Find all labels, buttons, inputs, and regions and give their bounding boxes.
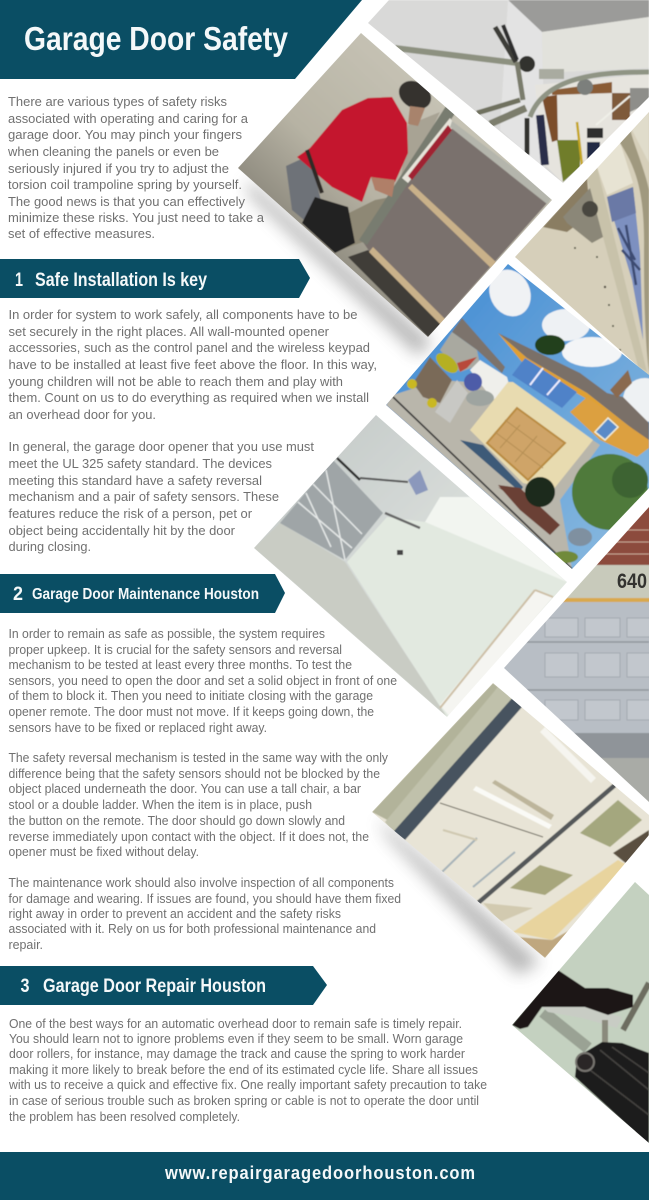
section 3 text [8,1016,487,1124]
footer band with website URL [0,1152,649,1200]
section 1 text: In general, the garage door opener that you use must [8,439,314,454]
section 2 text: object placed underneath the door. You can use a tall chair, a bar [8,781,362,796]
intro paragraph: associated with operating and caring for a [8,111,249,126]
intro paragraph: set of effective measures. [8,226,155,241]
section 3 text: in case of serious trouble such as broken spring or cable is not to operate the door until [9,1093,479,1108]
section 2 text: reverse immediately upon contact with the object. If it does not, the [8,829,369,844]
section 3 text: You should learn not to ignore problems even if they seem to be small. Worn garage [9,1031,463,1046]
photo: technician in red shirt working on door [230,30,560,340]
photo shadows [246,178,540,975]
heading 2: Garage Door Maintenance Houston: Garage Door Maintenance Houston [32,586,259,603]
section 1 text: In order for system to work safely, all components have to be [8,307,358,322]
section 1 text: object being accidentally hit by the door [8,523,236,538]
section 2 text: In order to remain as safe as possible, the system requires [8,626,325,641]
intro paragraph: minimize these risks. You just need to take a [8,210,265,225]
section 1 text: during closing. [8,539,91,554]
section 2 text: The safety reversal mechanism is tested in the same way with the only [8,750,388,765]
photo: brick wall, house number 640 and white garage door [500,500,649,808]
section 1 text [8,307,377,554]
photo: torsion spring hardware on garage ceiling [360,0,649,190]
heading 1: Safe Installation [0,259,310,298]
section 2 text: associated with it. Rely on us for both professional maintenance and [8,921,376,936]
intro paragraph: seriously injured if you try to adjust the [8,161,229,176]
section 1 text: an overhead door for you. [8,407,156,422]
section 2 text: mechanism to be tested at least every three months. To test the [8,657,352,672]
section 2 text: proper upkeep. It is crucial for the safety sensors and reversal [8,642,342,657]
section 1 text: them. Count on us to do everything as required when we install [8,390,369,405]
photo: garage interior with white walls [250,410,570,720]
footer band with website URL: www.repairgaragedoorhouston.com [164,1163,476,1183]
intro paragraph: when cleaning the panels or even be [7,144,219,159]
intro paragraph: torsion coil trampoline spring by yourself. [8,177,242,192]
section 2 text: for damage and wearing. If issues are found, you should have them fixed [8,891,401,906]
photo: yellow house with wooden garage door [380,260,649,575]
section 1 text: mechanism and a pair of safety sensors. These [8,489,279,504]
section 2 text: sensors, you need to open the door and set a solid object in front of one [8,673,397,688]
intro paragraph [7,94,265,241]
heading 1: Safe Installation: Safe Installation Is key [35,270,207,291]
section 1 text: set securely in the right places. All wall-mounted opener [8,324,330,339]
section 3 text: making it more likely to break before the end of its estimated cycle life. Share all issues [9,1062,478,1077]
section 2 text: repair. [8,937,43,952]
section 3 text: with us to receive a quick and effective fix. One really important safety precaution to take [8,1077,487,1092]
section 1 text: young children will not be able to reach them and play with [8,374,343,389]
heading 3: Garage Door Repair Houston [0,966,327,1005]
section 2 text: difference being that the safety sensors should not be blocked by the [8,766,380,781]
title: Garage Door Safety [24,20,289,57]
photo: torsion spring closeup [510,875,649,1145]
section 2 text: sensors have to be fixed or replaced right away. [8,720,267,735]
heading 1: Safe Installation: 1 [15,270,23,291]
section 1 text: accessories, such as the control panel and the wireless keypad [8,340,370,355]
section 2 text: stool or a double ladder. When the item is in place, push [8,797,312,812]
heading 2: Garage Door Maintenance Houston: 2 [13,584,23,605]
intro paragraph: There are various types of safety risks [8,94,227,109]
section 3 text: door rollers, for instance, may damage the track and cause the spring to work harder [9,1046,466,1061]
photo: cream garage door interior [370,680,649,965]
section 2 text: of them to block it. Then you need to initiate closing with the garage [8,688,373,703]
section 2 text [8,626,401,952]
heading 2: Garage Door Maintenance Houston [0,574,285,613]
section 1 text: meeting this standard have a safety reversal [8,473,262,488]
section 2 text: the button on the remote. The door should go down slowly and [8,813,345,828]
intro paragraph: garage door. You may pinch your fingers [8,127,242,142]
section 3 text: One of the best ways for an automatic overhead door to remain safe is timely repair. [9,1016,462,1031]
section 2 text: opener remote. The door must not move. If it keeps going down, the [8,704,374,719]
section 1 text: meet the UL 325 safety standard. The devices [8,456,272,471]
section 2 text: opener must be fixed without delay. [8,844,199,859]
photo: arched door track and window [510,110,649,380]
heading 3: Garage Door Repair Houston: 3 [20,976,30,997]
section 1 text: features reduce the risk of a person, pet or [8,506,253,521]
heading 3: Garage Door Repair Houston: Garage Door Repair Houston [43,976,266,997]
title banner [0,0,362,79]
section 3 text: the problem has been resolved completely. [9,1109,240,1124]
section 2 text: The maintenance work should also involve inspection of all components [8,875,394,890]
section 2 text: right away in order to prevent an accident and the safety risks [8,906,341,921]
intro paragraph: The good news is that you can effectively [8,194,245,209]
section 1 text: have to be installed at least five feet above the floor. In this way, [8,357,377,372]
